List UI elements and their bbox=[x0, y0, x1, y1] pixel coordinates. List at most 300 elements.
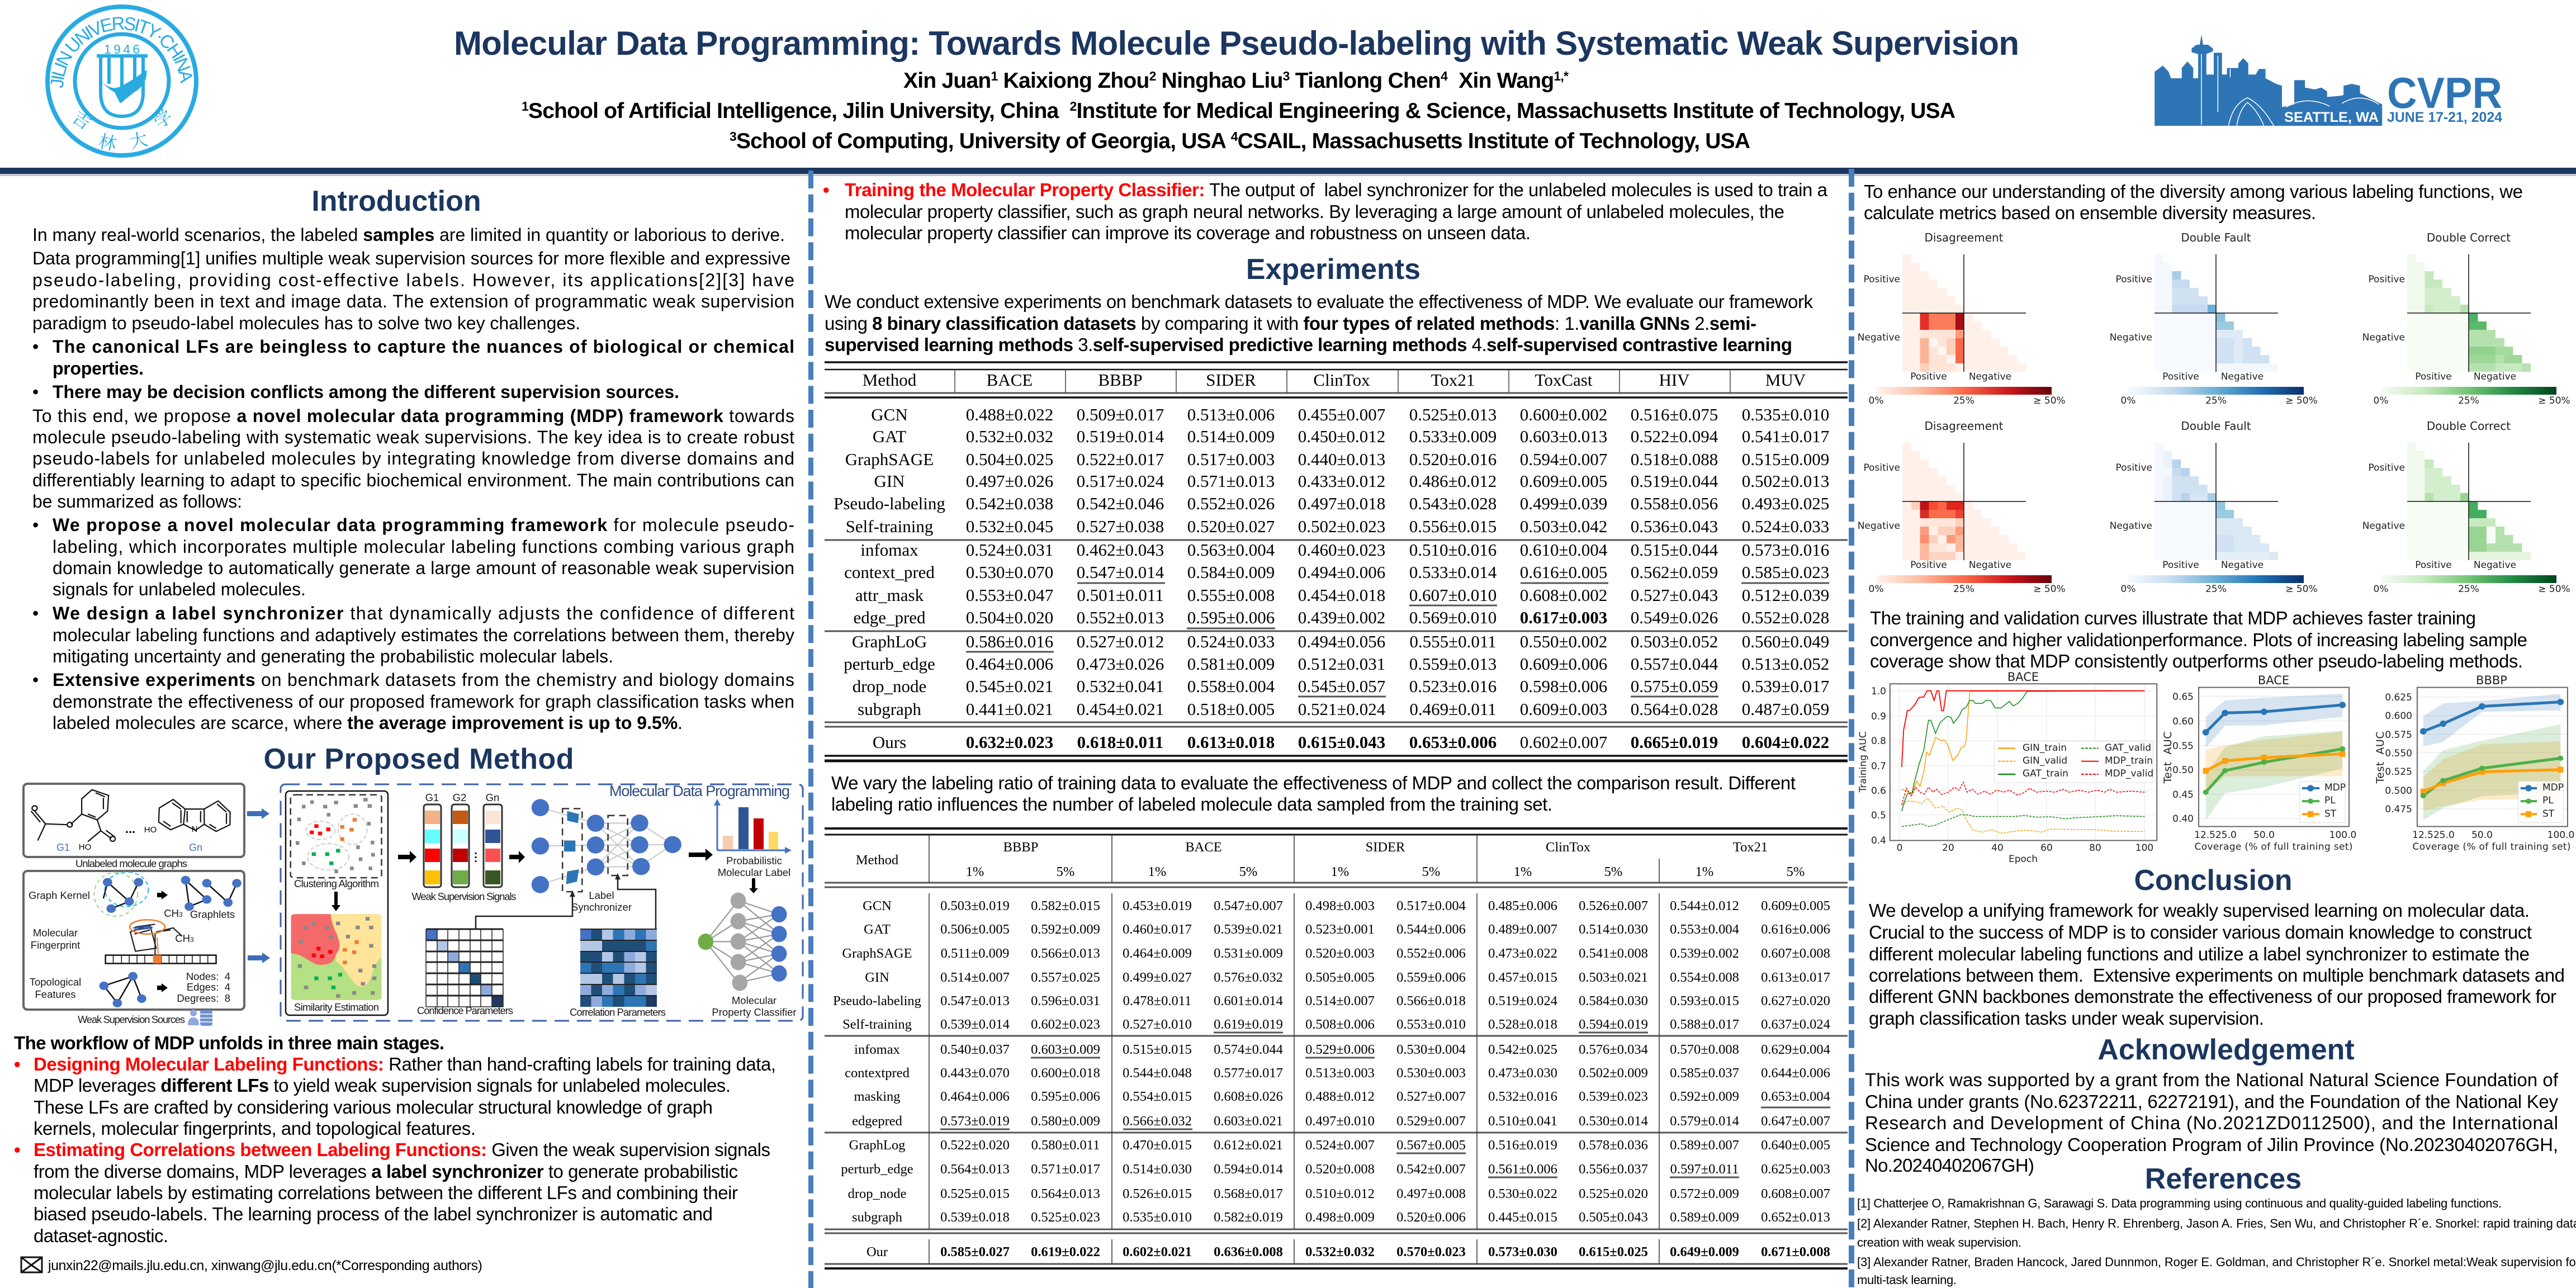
chart: label synchronizer network: Label bbox=[589, 889, 614, 901]
chart: BACE training AUC vs epoch: 0.7 bbox=[1871, 761, 1886, 772]
row: GAT: 0.616±0.006 bbox=[1761, 922, 1830, 937]
row: GraphLoG: 0.524±0.033 bbox=[1187, 632, 1275, 651]
row: edge_pred: 0.439±0.002 bbox=[1298, 608, 1385, 627]
chart: weak supervision signals bbox=[411, 792, 517, 902]
row: GCN: 0.503±0.019 bbox=[940, 898, 1010, 913]
row: drop_node: 0.530±0.022 bbox=[1488, 1186, 1557, 1201]
row: subgraph: 0.518±0.005 bbox=[1187, 699, 1275, 719]
panel: references bbox=[1857, 1163, 2576, 1287]
table subheader: Method bbox=[856, 853, 898, 868]
row: GIN: 0.609±0.005 bbox=[1520, 471, 1607, 491]
chart: heatmap double fault row 2: Positive bbox=[2162, 560, 2199, 571]
arrow: connector correlation to synchronizer bbox=[616, 875, 656, 929]
row: masking: 0.527±0.007 bbox=[1396, 1089, 1466, 1104]
text block: conclusion paragraph bbox=[1869, 900, 2565, 1029]
affiliation line 1: 2 bbox=[1069, 99, 1077, 113]
text block: stage 1 designing molecular labeling functions: • bbox=[14, 1054, 21, 1074]
table subheader: 5% bbox=[1057, 864, 1074, 879]
row: Self-training: 0.594±0.019 bbox=[1579, 1017, 1648, 1032]
row: GAT: 0.603±0.013 bbox=[1520, 427, 1607, 446]
panel: acknowledgement bbox=[1865, 1034, 2559, 1176]
chart: probabilistic molecular label: Molecular Label bbox=[718, 866, 790, 878]
heading: Conclusion: Conclusion bbox=[2134, 864, 2293, 897]
text block: stage 1 designing molecular labeling functions: kernels, molecular fingerprints, and topological features. bbox=[34, 1118, 476, 1139]
chart: heatmap double fault row 2: Negative bbox=[2221, 560, 2264, 571]
row: GAT: 0.522±0.094 bbox=[1631, 427, 1718, 446]
text block: experiments description: We conduct extensive experiments on benchmark datasets to evaluate the effectiveness of MDP. We evaluate our framework bbox=[825, 291, 1813, 312]
row: GIN: 0.576±0.032 bbox=[1214, 970, 1283, 985]
text block: stage 3 training classifier: • bbox=[823, 179, 830, 200]
row: edgepred: 0.647±0.007 bbox=[1761, 1114, 1830, 1129]
text block: reference list: [1] Chatterjee O, Ramakrishnan G, Sarawagi S. Data programming using continuous and quality-guided labeling functions. bbox=[1857, 1196, 2502, 1210]
row: GCN: 0.525±0.013 bbox=[1409, 405, 1497, 424]
affiliation line 2: School of Computing, University of Georgia, USA bbox=[736, 129, 1232, 153]
text block: intro paragraphs: molecule pseudo-labeling with systematic weak supervisions. The key idea is to create robust bbox=[32, 427, 794, 447]
row: Ours: 0.632±0.023 bbox=[966, 732, 1053, 752]
logo: Jilin University seal: 学 bbox=[148, 102, 177, 134]
row: drop_node: 0.572±0.009 bbox=[1670, 1186, 1739, 1201]
chart: heatmap disagreement row 2: Positive bbox=[1910, 560, 1947, 571]
row: subgraph: 0.589±0.009 bbox=[1670, 1210, 1739, 1225]
chart: BBBP test AUC vs coverage bbox=[2374, 674, 2574, 853]
row: Self-training: Self-training bbox=[842, 1017, 912, 1032]
table: labeling ratio comparison bbox=[825, 828, 1848, 1268]
row: perturb_edge: 0.571±0.017 bbox=[1031, 1162, 1100, 1177]
row: context_pred: 0.547±0.014 bbox=[1077, 562, 1164, 582]
row: contextpred: 0.513±0.003 bbox=[1305, 1066, 1375, 1081]
row: perturb_edge: 0.581±0.009 bbox=[1187, 654, 1275, 674]
row: Self-training: 0.588±0.017 bbox=[1670, 1017, 1739, 1032]
icon: source graphs bbox=[94, 872, 242, 1007]
chart: BACE training AUC vs epoch bbox=[1858, 670, 2157, 865]
row: infomax: 0.515±0.015 bbox=[1123, 1042, 1192, 1057]
row: attr_mask: 0.527±0.043 bbox=[1631, 585, 1718, 605]
table header: SIDER bbox=[1206, 370, 1256, 390]
row: subgraph: 0.535±0.010 bbox=[1123, 1210, 1192, 1225]
chart: BACE training AUC vs epoch: 0 bbox=[1897, 842, 1902, 854]
row: GAT: 0.460±0.017 bbox=[1123, 922, 1192, 937]
row: drop_node: 0.525±0.015 bbox=[940, 1186, 1010, 1201]
row: infomax: 0.510±0.016 bbox=[1409, 540, 1497, 560]
text block: contributions list: mitigating uncertainty and generating the probabilistic molecular labels. bbox=[53, 646, 613, 666]
chart: BBBP test AUC vs coverage: 0.525 bbox=[2385, 766, 2412, 778]
text block: intro paragraphs: • bbox=[32, 382, 39, 402]
panel: unlabeled molecule graphs: G1 bbox=[56, 842, 70, 853]
row: GAT: 0.533±0.009 bbox=[1409, 427, 1497, 446]
chart: BACE test AUC vs coverage: 0.60 bbox=[2172, 716, 2194, 727]
row: subgraph: 0.487±0.059 bbox=[1742, 699, 1829, 719]
logo: Jilin University seal: 吉 bbox=[68, 103, 97, 135]
row: attr_mask: 0.454±0.018 bbox=[1298, 585, 1385, 605]
text block: stage 3 training classifier: Training the Molecular Property Classifier: The output of label synchronizer for the unlabeled molecules is used to train a bbox=[845, 179, 1828, 200]
row: drop_node: 0.526±0.015 bbox=[1123, 1186, 1192, 1201]
chart: heatmap disagreement row 1: 25% bbox=[1953, 395, 1974, 406]
text block: contributions list: • bbox=[32, 515, 39, 535]
row: subgraph: 0.564±0.028 bbox=[1631, 699, 1718, 719]
row: GraphSAGE: 0.541±0.008 bbox=[1579, 946, 1648, 961]
chart: BACE training AUC vs epoch: 0.8 bbox=[1871, 736, 1886, 747]
row: infomax: 0.524±0.031 bbox=[966, 540, 1053, 560]
row: GIN: 0.519±0.044 bbox=[1631, 471, 1718, 491]
row: GCN: 0.488±0.022 bbox=[966, 405, 1053, 424]
row: contextpred: 0.644±0.006 bbox=[1761, 1066, 1830, 1081]
label: CH3: 3 bbox=[190, 936, 194, 944]
arrow: connector confidence to synchronizer bbox=[476, 892, 574, 929]
row: GIN: 0.517±0.024 bbox=[1077, 471, 1164, 491]
label: Molecular Fingerprint: Molecular bbox=[33, 927, 78, 939]
chart: BACE training AUC vs epoch: GIN_train bbox=[2023, 742, 2067, 754]
row: GCN: GCN bbox=[863, 898, 892, 913]
text block: intro paragraphs: In many real-world scenarios, the labeled samples are limited in quantity or laborious to derive. bbox=[32, 225, 785, 245]
chart: heatmap double correct row 2: Positive bbox=[2368, 462, 2405, 473]
chart: heatmap disagreement row 1: ≥ 50% bbox=[2033, 395, 2066, 406]
row: context_pred: 0.494±0.006 bbox=[1298, 562, 1385, 582]
row: GraphSAGE: 0.504±0.025 bbox=[966, 449, 1053, 469]
row: context_pred: 0.616±0.005 bbox=[1520, 562, 1607, 582]
chart: label synchronizer network bbox=[532, 799, 681, 913]
chart: BACE test AUC vs coverage: PL bbox=[2324, 795, 2336, 806]
heading: Acknowledgement: Acknowledgement bbox=[2097, 1034, 2355, 1066]
chart: heatmap double correct row 2: ≥ 50% bbox=[2538, 584, 2570, 595]
icon: molecules bbox=[31, 790, 230, 841]
affiliation line 1: 1 bbox=[522, 99, 529, 113]
table subheader: 5% bbox=[1604, 864, 1622, 879]
authors: 1,* bbox=[1554, 69, 1569, 83]
row: Pseudo-labeling: 0.543±0.028 bbox=[1409, 494, 1497, 513]
row: GCN: 0.516±0.075 bbox=[1631, 405, 1718, 424]
logo: Jilin University seal: 1946 bbox=[104, 42, 140, 56]
label: unlabeled molecule graphs: Unlabeled molecule graphs bbox=[75, 858, 187, 869]
row: GraphSAGE: 0.511±0.009 bbox=[941, 946, 1009, 961]
authors: Xin Wang bbox=[1447, 69, 1554, 93]
row: GraphLoG: 0.527±0.012 bbox=[1077, 632, 1164, 651]
text block: intro paragraphs: pseudo-labeling, providing cost-effective labels. However, its applications[2][3] have bbox=[32, 270, 794, 290]
chart: heatmap double fault row 2: Positive bbox=[2115, 462, 2152, 473]
chart: heatmap disagreement row 2 bbox=[1858, 419, 2066, 595]
row: GraphSAGE: 0.440±0.013 bbox=[1298, 449, 1385, 469]
chart: BBBP test AUC vs coverage: 12.525.0 bbox=[2412, 830, 2455, 841]
authors: 1 bbox=[991, 69, 998, 83]
row: GAT: GAT bbox=[864, 922, 891, 937]
chart: BBBP test AUC vs coverage: Test AUC bbox=[2374, 731, 2386, 784]
row: GCN: 0.526±0.007 bbox=[1579, 898, 1648, 913]
row: attr_mask: attr_mask bbox=[855, 585, 924, 605]
row: GraphLog: 0.522±0.020 bbox=[940, 1138, 1010, 1153]
text block: labeling ratio description: We vary the labeling ratio of training data to evaluate the effectiveness of MDP and collect the comparison result. Different bbox=[831, 773, 1796, 793]
chart: heatmap double fault row 2: Double Fault bbox=[2181, 419, 2251, 433]
chart: heatmap double correct row 1: 0% bbox=[2374, 395, 2388, 406]
text block: diversity intro: To enhance our understanding of the diversity among various labeling functions, we bbox=[1864, 181, 2523, 202]
row: Self-training: 0.553±0.010 bbox=[1396, 1017, 1466, 1032]
row: Pseudo-labeling: 0.499±0.039 bbox=[1520, 494, 1607, 513]
row: Self-training: Self-training bbox=[846, 517, 933, 536]
chart: heatmap double fault row 1: Positive bbox=[2115, 274, 2152, 285]
row: contextpred: 0.577±0.017 bbox=[1214, 1066, 1283, 1081]
chart: heatmap double fault row 2: 0% bbox=[2121, 584, 2135, 595]
row: GraphSAGE: 0.566±0.013 bbox=[1031, 946, 1100, 961]
chart: correlation parameters matrix bbox=[570, 929, 666, 1018]
chart: correlation parameters matrix: Correlation Parameters bbox=[570, 1006, 666, 1018]
text block: contributions list: labeling, which incorporates multiple molecular labeling functions combing various graph bbox=[53, 537, 794, 557]
chart: BACE training AUC vs epoch: 0.4 bbox=[1871, 835, 1886, 846]
chart: BACE test AUC vs coverage: 0.50 bbox=[2172, 765, 2194, 776]
text block: stage 3 training classifier bbox=[823, 179, 1828, 243]
row: infomax: 0.462±0.043 bbox=[1077, 540, 1164, 560]
logo: Jilin University seal: 林 bbox=[96, 127, 119, 156]
text block: stage 2 estimating correlations: • bbox=[14, 1139, 21, 1160]
chart: confidence parameters matrix bbox=[417, 929, 513, 1016]
row: edgepred: 0.530±0.014 bbox=[1579, 1114, 1648, 1129]
label: Graph Kernel: Graph Kernel bbox=[29, 889, 90, 901]
row: attr_mask: 0.607±0.010 bbox=[1409, 585, 1497, 605]
row: GraphLoG: 0.586±0.016 bbox=[966, 632, 1053, 651]
text block: intro paragraphs: be summarized as follows: bbox=[32, 491, 242, 512]
chart: heatmap disagreement row 1: Disagreement bbox=[1924, 231, 2004, 244]
row: infomax: 0.460±0.023 bbox=[1298, 540, 1385, 560]
row: Self-training: 0.503±0.042 bbox=[1520, 517, 1607, 536]
row: drop_node: 0.558±0.004 bbox=[1187, 676, 1275, 696]
logo: CVPR Seattle 2024: JUNE 17-21, 2024 bbox=[2387, 110, 2502, 125]
table header: BBBP bbox=[1098, 370, 1143, 390]
heading: References: References bbox=[2145, 1163, 2302, 1195]
row: Pseudo-labeling: 0.542±0.038 bbox=[966, 494, 1053, 513]
panel: conclusion bbox=[1869, 864, 2565, 1029]
row: GIN: 0.559±0.006 bbox=[1396, 970, 1466, 985]
panel: diversity analysis bbox=[1858, 181, 2570, 595]
chart: probabilistic molecular label bbox=[714, 799, 792, 878]
row: edgepred: 0.603±0.021 bbox=[1214, 1114, 1283, 1129]
chart: BBBP test AUC vs coverage: 0.550 bbox=[2385, 748, 2412, 759]
chart: heatmap double correct row 2: Negative bbox=[2474, 560, 2516, 571]
row: Self-training: 0.536±0.043 bbox=[1631, 517, 1718, 536]
row: GCN: 0.509±0.017 bbox=[1077, 405, 1164, 424]
row: contextpred: 0.443±0.070 bbox=[940, 1066, 1010, 1081]
row: contextpred: 0.473±0.030 bbox=[1488, 1066, 1557, 1081]
arrow: blue bottom bbox=[248, 953, 270, 963]
chart: heatmap disagreement row 2: 0% bbox=[1869, 584, 1883, 595]
label: Similarity Estimation: Similarity Estimation bbox=[294, 1001, 379, 1013]
row: subgraph: 0.521±0.024 bbox=[1298, 699, 1386, 719]
table header: Tox21 bbox=[1431, 370, 1475, 390]
row: Ours: 0.653±0.006 bbox=[1409, 732, 1497, 752]
table header: ClinTox bbox=[1313, 370, 1370, 390]
chart: similarity map bbox=[291, 914, 382, 1000]
table header: ClinTox bbox=[1546, 840, 1590, 855]
text block: stage 2 estimating correlations bbox=[14, 1139, 770, 1246]
label: graph counts: Degrees: 8 bbox=[177, 992, 230, 1004]
row: perturb_edge: 0.513±0.052 bbox=[1742, 654, 1829, 674]
row: GraphLoG: 0.494±0.056 bbox=[1298, 632, 1385, 651]
row: Pseudo-labeling: 0.542±0.046 bbox=[1077, 494, 1164, 513]
row: GraphSAGE: 0.539±0.002 bbox=[1670, 946, 1739, 961]
row: GCN: 0.455±0.007 bbox=[1298, 405, 1385, 424]
row: infomax: 0.574±0.044 bbox=[1214, 1042, 1283, 1057]
row: GCN: 0.485±0.006 bbox=[1488, 898, 1557, 913]
table subheader: 5% bbox=[1787, 864, 1805, 879]
table: benchmark comparison bbox=[825, 362, 1848, 761]
row: infomax: 0.570±0.008 bbox=[1670, 1042, 1739, 1057]
logo: CVPR Seattle 2024: SEATTLE, WA bbox=[2284, 110, 2379, 125]
text block: contributions list: demonstrate the effectiveness of our proposed framework for graph classification tasks when bbox=[53, 692, 794, 712]
text block: intro paragraphs: paradigm to pseudo-label molecules has to solve two key challenges. bbox=[32, 313, 580, 333]
table subheader: 1% bbox=[1514, 864, 1532, 879]
row: Self-training: 0.539±0.014 bbox=[940, 1017, 1010, 1032]
row: Ours: 0.604±0.022 bbox=[1742, 732, 1829, 752]
chart: BACE test AUC vs coverage: 50.0 bbox=[2253, 830, 2275, 841]
text block: intro paragraphs bbox=[32, 225, 794, 512]
row: perturb_edge: 0.512±0.031 bbox=[1298, 654, 1385, 674]
row: perturb_edge: 0.464±0.006 bbox=[966, 654, 1053, 674]
row: GraphLoG: 0.555±0.011 bbox=[1409, 632, 1497, 651]
chart: BACE training AUC vs epoch: Epoch bbox=[2009, 854, 2038, 865]
row: GCN: 0.517±0.004 bbox=[1396, 898, 1466, 913]
row: context_pred: 0.533±0.014 bbox=[1409, 562, 1497, 582]
chart: heatmap disagreement row 1: Positive bbox=[1910, 371, 1947, 382]
row: edge_pred: 0.549±0.026 bbox=[1631, 608, 1718, 627]
authors: 3 bbox=[1283, 69, 1290, 83]
chart: BBBP test AUC vs coverage: MDP bbox=[2542, 782, 2564, 793]
text block: reference list: multi-task learning. bbox=[1857, 1273, 1957, 1287]
panel: unlabeled molecule graphs: ... bbox=[125, 822, 135, 836]
row: infomax: 0.540±0.037 bbox=[940, 1042, 1010, 1057]
row: masking: 0.554±0.015 bbox=[1123, 1089, 1192, 1104]
row: edgepred: 0.529±0.007 bbox=[1396, 1114, 1466, 1129]
label: Clustering Algorithm: Clustering Algorithm bbox=[294, 878, 379, 889]
chart: heatmap disagreement row 2: Positive bbox=[1863, 462, 1900, 473]
table header: BACE bbox=[987, 370, 1033, 390]
chart: BBBP test AUC vs coverage: 0.600 bbox=[2385, 711, 2412, 722]
text block: contributions list: labeled molecules are scarce, where the average improvement is up to 9.5%. bbox=[53, 713, 683, 733]
row: edge_pred: edge_pred bbox=[853, 608, 926, 627]
chart: heatmap double fault row 2: Negative bbox=[2110, 520, 2152, 532]
affiliation line 2: 3 bbox=[730, 129, 737, 144]
panel: unlabeled molecule graphs bbox=[23, 784, 244, 857]
label: graph counts: Edges: 4 bbox=[187, 981, 230, 993]
table subheader: 1% bbox=[1696, 864, 1713, 879]
row: context_pred: context_pred bbox=[844, 562, 935, 582]
text block: contributions list: Extensive experiments on benchmark datasets from the chemistry and biology domains bbox=[53, 670, 794, 690]
text block: experiments description bbox=[825, 291, 1813, 355]
text block: stage 3 training classifier: molecular property classifier, such as graph neural networks. By leveraging a large amount of unlabeled molecules, the bbox=[845, 201, 1784, 222]
text block: funding: Research and Development of China (No.2021ZD0112500), and the International bbox=[1865, 1112, 2558, 1133]
row: infomax: 0.610±0.004 bbox=[1520, 540, 1608, 560]
text block: intro paragraphs: The canonical LFs are beingless to capture the nuances of biological or chemical bbox=[53, 337, 794, 357]
row: GIN: 0.571±0.013 bbox=[1187, 471, 1275, 491]
row: masking: 0.532±0.016 bbox=[1488, 1089, 1557, 1104]
row: GraphLoG: 0.560±0.049 bbox=[1742, 632, 1829, 651]
chart: BACE test AUC vs coverage: 0.40 bbox=[2172, 813, 2194, 825]
row: GAT: GAT bbox=[873, 427, 906, 446]
row: GIN: 0.503±0.021 bbox=[1579, 970, 1648, 985]
chart: weak supervision signals: Gn bbox=[486, 792, 499, 803]
chart: heatmap double fault row 1: 25% bbox=[2205, 395, 2227, 406]
row: GraphSAGE: 0.552±0.006 bbox=[1396, 946, 1466, 961]
row: GAT: 0.532±0.032 bbox=[966, 427, 1053, 446]
chart: BACE test AUC vs coverage: 12.525.0 bbox=[2194, 830, 2237, 841]
arrow: black to probabilities bbox=[689, 849, 713, 861]
row: GIN: 0.433±0.012 bbox=[1298, 471, 1385, 491]
text block: intro paragraphs: properties. bbox=[53, 358, 144, 378]
text block: contributions list bbox=[32, 515, 794, 733]
text block: reference list bbox=[1857, 1196, 2576, 1287]
chart: heatmap double correct row 2: Positive bbox=[2415, 560, 2452, 571]
label: CH3: CH bbox=[175, 932, 190, 944]
row: perturb_edge: 0.625±0.003 bbox=[1761, 1162, 1830, 1177]
label: Topological Features: Features bbox=[35, 988, 76, 1000]
chart: heatmap disagreement row 2: Negative bbox=[1969, 560, 2011, 571]
row: GraphLog: 0.516±0.019 bbox=[1488, 1138, 1557, 1153]
chart: heatmap double correct row 1: Double Correct bbox=[2427, 231, 2511, 244]
text block: curves description: coverage show that MDP consistently outperforms other pseudo-labeling methods. bbox=[1870, 651, 2523, 671]
text block: diversity intro: calculate metrics based on ensemble diversity measures. bbox=[1864, 202, 2316, 223]
text block: funding: No.20240402067GH) bbox=[1865, 1155, 2034, 1176]
row: edgepred: 0.497±0.010 bbox=[1305, 1114, 1375, 1129]
row: Pseudo-labeling: 0.547±0.013 bbox=[940, 993, 1010, 1008]
row: perturb_edge: 0.609±0.006 bbox=[1520, 654, 1607, 674]
chart: heatmap double correct row 1: Negative bbox=[2474, 371, 2516, 382]
row: Our: 0.573±0.030 bbox=[1488, 1244, 1557, 1259]
text block: contributions list: We propose a novel molecular data programming framework for molecule pseudo- bbox=[53, 515, 794, 535]
panel: unlabeled molecule graphs: Gn bbox=[189, 842, 202, 853]
row: drop_node: 0.545±0.021 bbox=[966, 676, 1053, 696]
row: subgraph: 0.454±0.021 bbox=[1077, 699, 1164, 719]
label: CH3: CH3 bbox=[164, 907, 183, 919]
row: infomax: 0.542±0.025 bbox=[1488, 1042, 1557, 1057]
row: drop_node: 0.545±0.057 bbox=[1298, 676, 1385, 696]
row: Our: 0.602±0.021 bbox=[1123, 1244, 1192, 1259]
row: GraphSAGE: 0.520±0.003 bbox=[1305, 946, 1375, 961]
row: Self-training: 0.508±0.006 bbox=[1305, 1017, 1375, 1032]
chart: BACE training AUC vs epoch: 1.0 bbox=[1871, 686, 1886, 697]
row: Self-training: 0.528±0.018 bbox=[1488, 1017, 1557, 1032]
row: GCN: 0.513±0.006 bbox=[1187, 405, 1275, 424]
chart: heatmap disagreement row 1: 0% bbox=[1869, 395, 1883, 406]
row: infomax: infomax bbox=[860, 540, 918, 560]
chart: heatmap double correct row 1: Negative bbox=[2362, 332, 2405, 343]
text block: contributions list: signals for unlabeled molecules. bbox=[53, 579, 306, 599]
row: edge_pred: 0.504±0.020 bbox=[966, 608, 1053, 627]
label: Topological Features: Topological bbox=[30, 976, 81, 988]
row: infomax: 0.515±0.044 bbox=[1631, 540, 1718, 560]
row: subgraph: 0.498±0.009 bbox=[1305, 1210, 1375, 1225]
row: subgraph: subgraph bbox=[858, 699, 921, 719]
table subheader: 5% bbox=[1422, 864, 1440, 879]
row: Pseudo-labeling: 0.596±0.031 bbox=[1031, 993, 1100, 1008]
panel: workflow bbox=[14, 1033, 776, 1273]
row: edgepred: edgepred bbox=[852, 1114, 902, 1129]
chart: clustering scatter bbox=[291, 795, 382, 878]
chart: BACE training AUC vs epoch: 100 bbox=[2135, 842, 2153, 854]
chart: heatmap disagreement row 2: Disagreement bbox=[1924, 419, 2004, 433]
row: Self-training: 0.527±0.038 bbox=[1077, 517, 1164, 536]
row: GraphSAGE: GraphSAGE bbox=[845, 449, 934, 469]
row: GraphSAGE: GraphSAGE bbox=[842, 946, 912, 961]
chart: BACE test AUC vs coverage: 0.55 bbox=[2172, 741, 2194, 752]
row: infomax: infomax bbox=[854, 1042, 900, 1057]
table header: BBBP bbox=[1003, 840, 1038, 855]
arrow: down to classifier bbox=[749, 878, 758, 893]
chart: heatmap double correct row 2: Negative bbox=[2362, 520, 2405, 532]
row: drop_node: drop_node bbox=[853, 676, 926, 696]
row: infomax: 0.576±0.034 bbox=[1579, 1042, 1648, 1057]
chart: BACE training AUC vs epoch: 40 bbox=[1991, 842, 2004, 854]
row: subgraph: 0.609±0.003 bbox=[1520, 699, 1607, 719]
heading: Molecular Data Programming: Molecular Data Programming bbox=[609, 783, 790, 799]
panel: unlabeled molecule graphs: N bbox=[192, 825, 197, 834]
row: GIN: 0.613±0.017 bbox=[1761, 970, 1830, 985]
text block: stage 2 estimating correlations: from the diverse domains, MDP leverages a label synchronizer to generate probabilistic bbox=[34, 1161, 738, 1182]
row: perturb_edge: 0.597±0.011 bbox=[1670, 1162, 1739, 1177]
